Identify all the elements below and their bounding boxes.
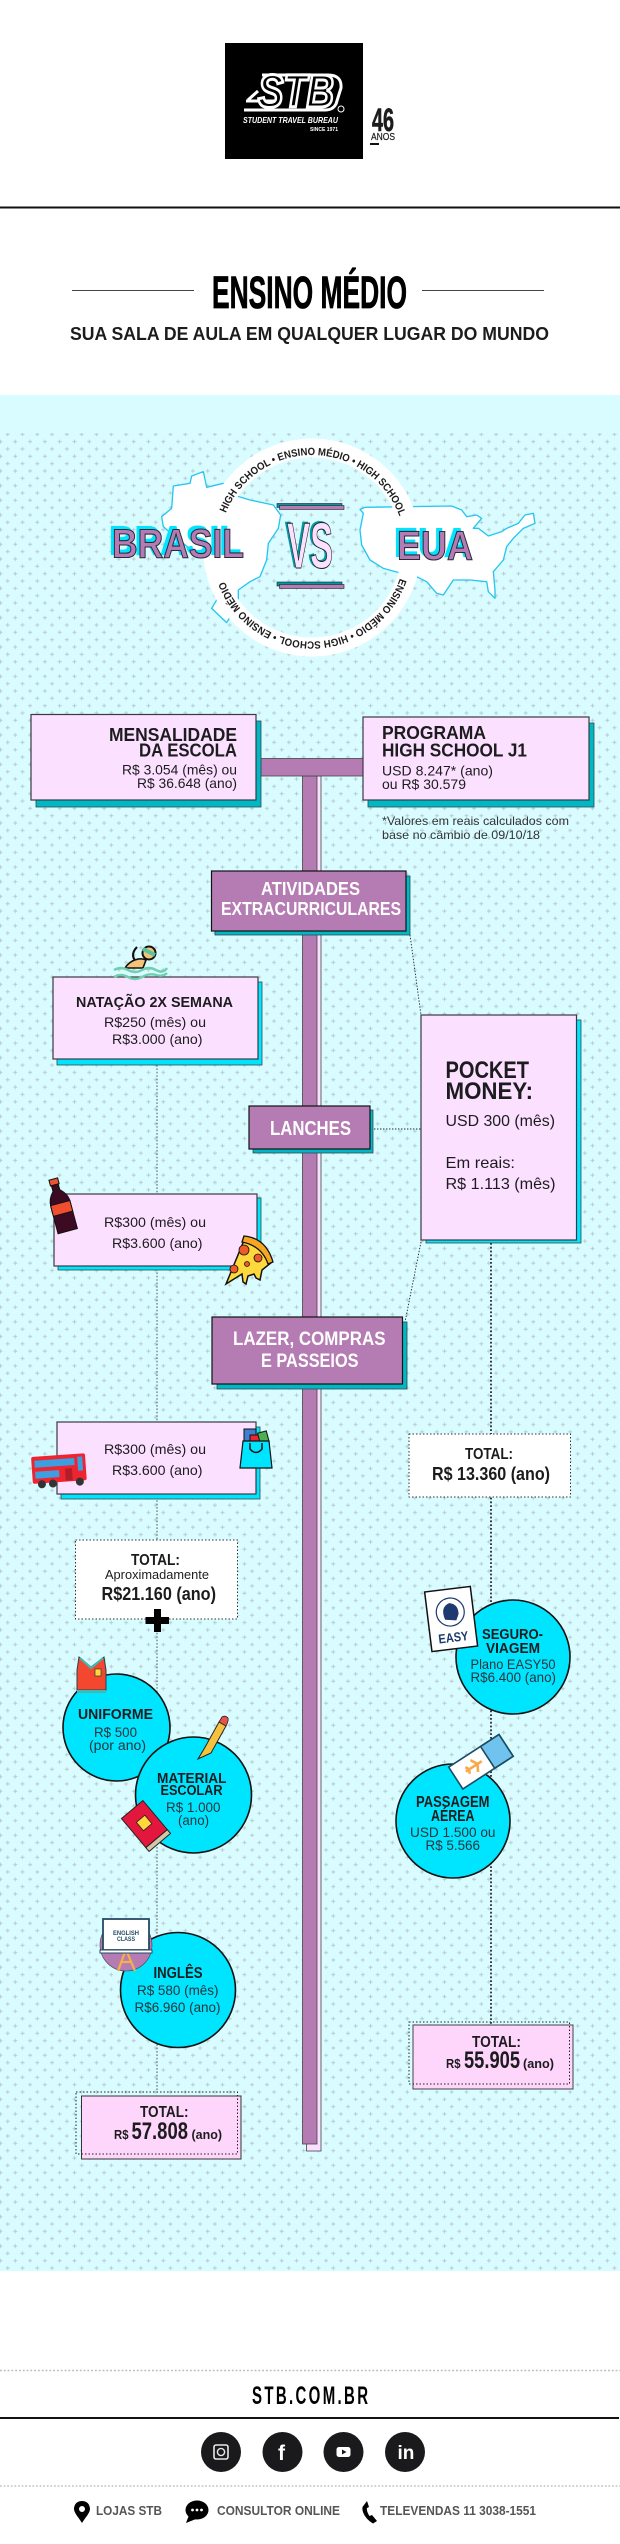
central trunk (302, 776, 321, 2151)
circle: material escolar: (ano) (178, 1812, 209, 1828)
badge: 46 anos (370, 102, 395, 145)
circle: material escolar: MATERIAL (157, 1770, 226, 1787)
icon: linkedin: in (398, 2443, 414, 2464)
ring: high school / ensino médio (204, 438, 418, 656)
ring: high school / ensino médio: ENSINO MÉDIO • HIGH SCHOOL • ENSINO MÉDIO (219, 578, 406, 649)
panel: programa high school J1: USD 8.247* (ano) (382, 762, 493, 778)
map: Brasil (162, 472, 281, 623)
note: exchange rate: base no câmbio de 09/10/18 (382, 828, 540, 842)
subtitle: SUA SALA DE AULA EM QUALQUER LUGAR DO MUNDO (70, 324, 549, 344)
callout: total final esquerda: R$ (114, 2127, 129, 2142)
panel: programa high school J1: PROGRAMA (382, 723, 486, 743)
heading: lanches (249, 1106, 373, 1153)
icon: shopping bag (240, 1429, 272, 1468)
background pattern (0, 433, 620, 2271)
note: exchange rate (382, 814, 569, 842)
panel: lanches valores: R$3.600 (ano) (112, 1235, 202, 1251)
icon: uniform vest (77, 1657, 106, 1693)
website: STB.COM.BR (252, 2382, 370, 2410)
callout: total final esquerda: TOTAL: (140, 2104, 188, 2121)
icon: pencil (198, 1716, 228, 1759)
top rule (0, 206, 620, 208)
callout: total direita: TOTAL: (465, 1446, 513, 1463)
panel: mensalidade da escola: DA ESCOLA (139, 740, 237, 760)
footer: consultor online: CONSULTOR ONLINE (217, 2503, 340, 2518)
icon: english class board: CLASS (117, 1937, 135, 1943)
panel: lanches valores: R$300 (mês) ou (104, 1214, 206, 1230)
circle: passagem aérea: USD 1.500 ou (410, 1824, 496, 1840)
heading: atividades extracurriculares: EXTRACURRICULARES (221, 899, 401, 919)
badge: 46 anos: ANOS (371, 132, 395, 143)
ring: high school / ensino médio: HIGH SCHOOL • ENSINO MÉDIO • HIGH SCHOOL (220, 448, 405, 516)
panel: light blue background (0, 395, 620, 2271)
panel: mensalidade da escola (31, 714, 261, 807)
panel: mensalidade da escola: R$ 36.648 (ano) (137, 775, 237, 791)
panel: pocket money: R$ 1.113 (mês) (446, 1176, 556, 1193)
panel: programa high school J1: HIGH SCHOOL J1 (382, 740, 527, 760)
circle: uniforme (63, 1674, 170, 1781)
heading: lazer, compras e passeios (212, 1317, 407, 1389)
heading: lazer, compras e passeios: E PASSEIOS (261, 1351, 358, 1372)
callout: total final esquerda (76, 2092, 241, 2159)
callout: total final esquerda: 57.808 (132, 2118, 188, 2145)
icon: english class board (100, 1919, 152, 1971)
heading: BRASIL: BRASIL (112, 520, 244, 566)
circle: inglês: R$6.960 (ano) (134, 1999, 220, 2015)
footer: televendas: TELEVENDAS 11 3038-1551 (380, 2503, 536, 2518)
circle: seguro-viagem: R$6.400 (ano) (470, 1669, 556, 1685)
heading: VS: VS (287, 509, 333, 582)
panel: natação: NATAÇÃO 2X SEMANA (76, 993, 233, 1011)
callout: total final direita: 55.905 (464, 2047, 520, 2074)
icon: youtube (324, 2432, 364, 2472)
heading: atividades extracurriculares (212, 871, 410, 935)
panel: programa high school J1 (363, 717, 594, 807)
callout: total esquerda: R$21.160 (ano) (102, 1584, 216, 1604)
icon: facebook (262, 2432, 302, 2472)
logo: STB: SINCE 1971 (310, 127, 338, 133)
heading: lanches: LANCHES (270, 1118, 351, 1140)
circle: seguro-viagem: SEGURO- (482, 1626, 543, 1643)
circle: inglês (120, 1932, 236, 2048)
callout: total final direita (409, 2022, 573, 2089)
panel: pocket money (421, 1015, 581, 1243)
heading: EUA: EUA (397, 522, 473, 568)
panel: natação: R$3.000 (ano) (112, 1031, 202, 1047)
footer: lojas (74, 2501, 162, 2523)
circle: passagem aérea (396, 1764, 510, 1878)
panel: pocket money: Em reais: (446, 1155, 515, 1172)
callout: total esquerda (76, 1540, 238, 1619)
panel: mensalidade da escola: R$ 3.054 (mês) ou (122, 762, 237, 778)
heading: lazer, compras e passeios: LAZER, COMPRAS (233, 1329, 386, 1350)
callout: total direita: R$ 13.360 (ano) (432, 1464, 550, 1484)
icon: facebook: f (278, 2442, 286, 2465)
panel: lanches valores (54, 1194, 261, 1270)
callout: total final direita: TOTAL: (472, 2034, 521, 2051)
heading: VS (277, 504, 344, 588)
callout: total final direita: R$ (446, 2056, 461, 2071)
circle: material escolar (136, 1737, 252, 1853)
panel: programa high school J1: ou R$ 30.579 (382, 776, 466, 792)
circle: uniforme: UNIFORME (78, 1706, 153, 1723)
heading: atividades extracurriculares: ATIVIDADES (261, 879, 360, 899)
icon: linkedin (385, 2432, 425, 2472)
icon: airline ticket (449, 1734, 513, 1789)
circle: passagem aérea: AÉREA (431, 1808, 474, 1825)
logo: STB: STUDENT TRAVEL BUREAU (243, 115, 339, 125)
circle: uniforme: R$ 500 (94, 1724, 137, 1740)
footer: televendas (362, 2501, 536, 2524)
callout: total final direita: (ano) (523, 2056, 554, 2071)
note: exchange rate: *Valores em reais calculados com (382, 814, 569, 828)
icon: pizza slice (226, 1236, 273, 1284)
panel: lazer valores: R$300 (mês) ou (104, 1441, 206, 1457)
circle: inglês: INGLÊS (154, 1964, 202, 1982)
map: EUA (360, 506, 535, 598)
panel: lazer valores (57, 1422, 260, 1499)
circle: seguro-viagem (456, 1600, 570, 1714)
icon: instagram (201, 2432, 241, 2472)
logo: STB (225, 43, 363, 159)
icon: double decker bus (31, 1453, 87, 1489)
social icons (201, 2432, 425, 2472)
panel: lazer valores: R$3.600 (ano) (112, 1462, 202, 1478)
dotted line: left column (156, 1065, 158, 2092)
footer: lojas: LOJAS STB (96, 2503, 162, 2518)
connector bar (261, 758, 363, 776)
panel: pocket money: MONEY: (446, 1078, 533, 1105)
circle: passagem aérea: PASSAGEM (416, 1794, 490, 1811)
callout: total esquerda: Aproximadamente (105, 1567, 209, 1582)
circle: seguro-viagem: VIAGEM (486, 1640, 540, 1657)
dotted line: right column (490, 1243, 492, 2025)
panel: natação (53, 977, 262, 1065)
panel: mensalidade da escola: MENSALIDADE (109, 725, 237, 745)
circle: material escolar: ESCOLAR (160, 1782, 223, 1799)
dotted links to pocket money (374, 935, 421, 1322)
callout: total final esquerda: (ano) (192, 2127, 222, 2142)
footer: consultor online (186, 2500, 340, 2523)
callout: total esquerda: TOTAL: (131, 1552, 180, 1569)
circle: material escolar: R$ 1.000 (166, 1799, 221, 1815)
panel: pocket money: USD 300 (mês) (446, 1113, 555, 1130)
circle: inglês: R$ 580 (mês) (137, 1982, 218, 1998)
icon: swimmer (114, 946, 167, 979)
icon: plus (146, 1609, 169, 1632)
panel: pocket money: POCKET (446, 1057, 529, 1084)
icon: english class board: ENGLISH (113, 1931, 139, 1937)
badge: 46 anos: 46 (372, 102, 394, 138)
icon: easy card (425, 1586, 478, 1652)
callout: total direita (409, 1434, 570, 1497)
title: ENSINO MÉDIO (212, 267, 407, 318)
icon: soda bottle (44, 1176, 77, 1234)
icon: easy card: EASY (438, 1628, 469, 1647)
circle: passagem aérea: R$ 5.566 (426, 1837, 480, 1853)
circle: uniforme: (por ano) (89, 1737, 146, 1753)
icon: red book (121, 1801, 171, 1851)
panel: natação: R$250 (mês) ou (104, 1014, 206, 1030)
logo: STB: STB (258, 65, 334, 117)
circle: seguro-viagem: Plano EASY50 (470, 1656, 556, 1672)
